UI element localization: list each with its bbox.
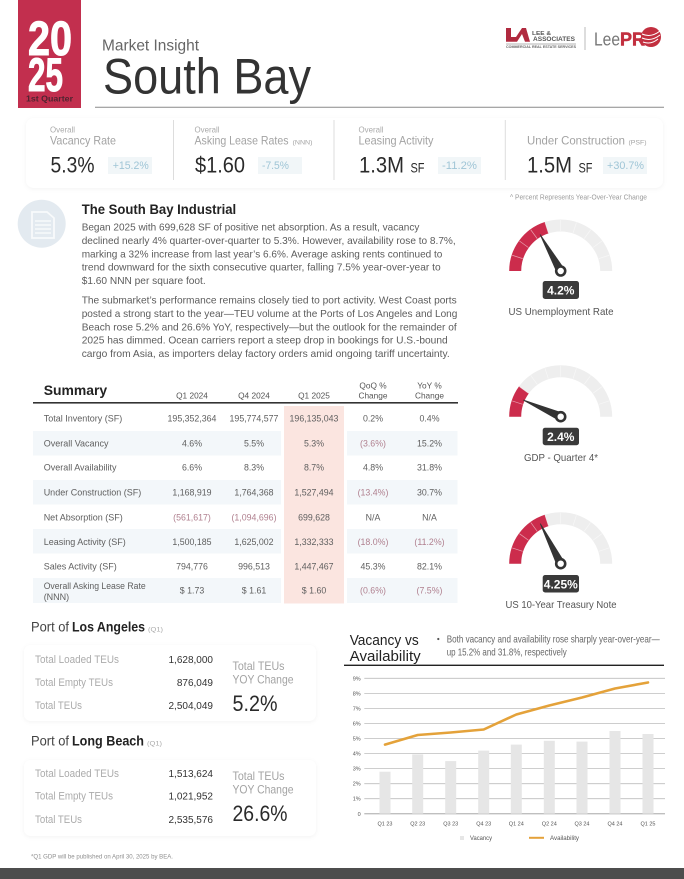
row: sales activity [44, 561, 442, 571]
row: leasing activity [44, 537, 445, 547]
gauge: GDP quarter 4 [512, 366, 609, 464]
legend: Availability [550, 836, 579, 842]
row: under construction: 30.7% [417, 488, 442, 498]
stat: leasing activity: -11.2% [442, 160, 477, 172]
highlighted column [284, 406, 344, 604]
gauge: GDP quarter 4: 2.4% [547, 430, 575, 444]
text block: market overview: trend downward for the sixth consecutive quarter, falling 7.5% year-over-year to [82, 262, 441, 274]
x axis labels: Q2 23 [410, 821, 425, 827]
logo: Lee and Associates, LeePRO: Lee [594, 29, 620, 49]
heading: port of long beach: Port of [31, 732, 69, 748]
row: net absorption [44, 512, 437, 522]
row: net absorption: 699,628 [298, 512, 330, 522]
table header: Q4 2024 [238, 390, 270, 400]
text block: market overview: Beach rose 5.2% and 26.6% YoY, respectively—but the outlook for the remainder of [82, 321, 457, 333]
footer bar [0, 868, 684, 879]
heading: vacancy vs availability [344, 632, 664, 666]
row: total inventory: 0.4% [419, 414, 440, 424]
heading: the south bay industrial: The South Bay Industrial [82, 202, 236, 217]
stat: asking lease rates: -7.5% [262, 160, 289, 172]
gauge: US unemployment rate: 4.2% [547, 284, 575, 298]
heading: port of long beach: Long Beach [72, 732, 144, 748]
heading: vacancy vs availability: Availability [350, 648, 421, 665]
table header: YoY % [417, 380, 442, 390]
panel: long beach TEUs: 2,535,576 [168, 815, 213, 826]
x axis labels: Q3 23 [443, 821, 458, 827]
table header: QoQ % [359, 380, 387, 390]
row: asking lease rate: (7.5%) [417, 586, 443, 596]
row: overall vacancy: 5.5% [244, 438, 264, 448]
heading: port of long beach [31, 732, 162, 748]
row: under construction: 1,527,494 [294, 488, 334, 498]
heading: port of long beach: (Q1) [147, 740, 162, 747]
x axis labels: Q1 23 [378, 821, 392, 827]
stat: under construction: SF [578, 159, 592, 175]
stat: vacancy rate: Vacancy Rate [50, 133, 116, 147]
panel: summary table [33, 380, 458, 604]
gauge: US 10-year treasury note [506, 513, 617, 611]
stat: leasing activity [358, 125, 481, 177]
panel: long beach TEUs: Total TEUs [35, 814, 82, 826]
table header [33, 380, 458, 404]
panel: los angeles TEUs: 5.2% [232, 691, 278, 716]
y axis labels [353, 676, 361, 818]
x axis labels: Q1 25 [641, 821, 655, 827]
row: sales activity: 1,447,467 [294, 561, 334, 571]
gauge: US unemployment rate: US Unemployment Rate [508, 306, 614, 318]
y axis labels: 1% [353, 797, 361, 803]
panel: los angeles TEUs: YOY Change [232, 672, 294, 686]
row: overall availability: Overall Availability [44, 463, 117, 473]
row: total inventory: 195,774,577 [230, 414, 279, 424]
row: total inventory: 195,352,364 [168, 414, 217, 424]
availability line [385, 682, 648, 745]
row: leasing activity: (18.0%) [358, 537, 388, 547]
panel: key stats [26, 118, 663, 188]
title block [95, 38, 664, 107]
row: under construction: 1,764,368 [234, 488, 274, 498]
row: asking lease rate: Overall Asking Lease Rate [44, 581, 146, 591]
logo: Lee and Associates, LeePRO: PR [620, 29, 645, 49]
panel: los angeles TEUs: Total Loaded TEUs [35, 654, 119, 666]
row: leasing activity: (11.2%) [414, 537, 445, 547]
panel: long beach TEUs: 1,513,624 [168, 769, 213, 780]
text block: market overview: declined nearly 4% quarter-over-quarter to 5.3%. However, availability rose to 8.7%, [82, 235, 456, 247]
heading: port of los angeles: Los Angeles [72, 618, 145, 634]
stat: under construction: (PSF) [628, 139, 646, 146]
heading: port of los angeles: Port of [31, 618, 69, 634]
stat: asking lease rates [194, 125, 312, 177]
row: overall vacancy: (3.6%) [360, 438, 386, 448]
panel: long beach TEUs: YOY Change [232, 782, 294, 796]
stat: leasing activity: Leasing Activity [358, 133, 434, 147]
row: overall vacancy: 4.6% [182, 438, 202, 448]
stat: leasing activity: SF [410, 159, 424, 175]
row: asking lease rate: (0.6%) [360, 586, 386, 596]
y axis labels: 3% [353, 767, 361, 773]
row: asking lease rate: (NNN) [44, 592, 69, 602]
row: total inventory [44, 414, 440, 424]
stat: under construction: +30.7% [607, 160, 644, 172]
y axis labels: 4% [353, 752, 361, 758]
stat: vacancy rate [50, 125, 152, 177]
text block: market overview: The submarket’s performance remains closely tied to port activity. West Coast ports [82, 295, 457, 307]
panel: los angeles TEUs: Total Empty TEUs [35, 677, 113, 689]
stat: asking lease rates: Overall [194, 125, 220, 135]
text block: market overview: Began 2025 with 699,628 SF of positive net absorption. As a result, vacancy [82, 222, 420, 234]
stat: under construction [527, 133, 647, 177]
row: under construction: 1,168,919 [172, 488, 212, 498]
year banner: 20 [28, 13, 72, 66]
row: under construction: Under Construction (SF) [44, 488, 141, 498]
stat: leasing activity: 1.3M [359, 152, 404, 177]
panel: los angeles TEUs: 1,628,000 [168, 655, 213, 666]
row: overall availability: 4.8% [363, 463, 383, 473]
row: total inventory: 196,135,043 [290, 414, 339, 424]
row: sales activity: 82.1% [417, 561, 442, 571]
row: leasing activity: 1,625,002 [234, 537, 274, 547]
heading: port of los angeles [31, 618, 163, 634]
legend: Vacancy [470, 836, 492, 842]
panel: los angeles TEUs [24, 645, 316, 721]
row: overall vacancy [44, 438, 442, 448]
row: net absorption: Net Absorption (SF) [44, 512, 123, 522]
x axis labels [378, 821, 655, 827]
x axis labels: Q4 23 [476, 821, 491, 827]
text block: market overview: 2025 has dimmed. Ocean carriers report a steep drop in bookings for U.S.-bound [82, 335, 448, 347]
table header: Summary [44, 382, 107, 398]
logo: Lee and Associates, LeePRO: ASSOCIATES [533, 36, 576, 43]
row: total inventory: 0.2% [363, 414, 383, 424]
stat: asking lease rates: (NNN) [292, 139, 312, 146]
row: overall availability: 6.6% [182, 463, 202, 473]
gauge: GDP quarter 4: GDP - Quarter 4* [524, 452, 598, 464]
row: asking lease rate [44, 581, 443, 602]
row: net absorption: N/A [366, 512, 380, 522]
row: sales activity: 996,513 [238, 561, 270, 571]
panel: long beach TEUs: 26.6% [232, 801, 288, 826]
panel: long beach TEUs [24, 760, 316, 836]
row: overall availability [44, 463, 442, 473]
panel: los angeles TEUs: Total TEUs [232, 659, 284, 673]
panel: los angeles TEUs: 2,504,049 [168, 701, 213, 712]
row: overall vacancy: Overall Vacancy [44, 438, 109, 448]
row: sales activity: 794,776 [176, 561, 208, 571]
stat: vacancy rate: 5.3% [50, 152, 94, 177]
row: leasing activity: 1,332,333 [294, 537, 334, 547]
row: leasing activity: 1,500,185 [172, 537, 212, 547]
row: overall availability: 8.7% [304, 463, 324, 473]
icon: document [18, 200, 66, 248]
table header: Change [358, 390, 388, 400]
stat: asking lease rates: $1.60 [195, 152, 245, 177]
legend [460, 836, 579, 842]
title block: Market Insight [102, 38, 200, 55]
heading: vacancy vs availability: Vacancy vs [350, 632, 419, 649]
table header: Change [415, 390, 444, 400]
row: net absorption: N/A [422, 512, 437, 522]
stat: under construction: 1.5M [527, 152, 572, 177]
row: overall vacancy: 5.3% [304, 438, 324, 448]
text block: market overview: $1.60 NNN per square foot. [82, 275, 206, 287]
logo: Lee and Associates, LeePRO: COMMERCIAL REAL ESTATE SERVICES [506, 45, 577, 49]
y axis labels: 0 [358, 812, 361, 818]
row: asking lease rate: $ 1.73 [180, 586, 204, 596]
stat: vacancy rate: +15.2% [113, 160, 149, 172]
y axis labels: 8% [353, 691, 361, 697]
heading: port of los angeles: (Q1) [148, 626, 163, 633]
x axis labels: Q4 24 [608, 821, 622, 827]
y axis labels: 5% [353, 736, 361, 742]
table header: Q1 2025 [298, 390, 330, 400]
panel: long beach TEUs: Total Empty TEUs [35, 791, 113, 803]
row: overall availability: 31.8% [417, 463, 442, 473]
stat: under construction: Under Construction [527, 133, 625, 147]
year banner: 25 [28, 48, 63, 101]
panel: long beach TEUs: Total Loaded TEUs [35, 768, 119, 780]
text block: market overview: marking a 32% increase from last year’s 6.6%. Average asking rents continued to [82, 248, 443, 260]
row: overall availability: 8.3% [244, 463, 264, 473]
row: overall vacancy: 15.2% [417, 438, 442, 448]
y axis labels: 6% [353, 722, 361, 728]
y axis labels: 2% [353, 782, 361, 788]
text block: market overview: cargo from Asia, as importers delay factory orders amid ongoing tariff uncertainty. [82, 348, 450, 360]
chart: vacancy vs availability [353, 676, 665, 842]
stat: vacancy rate: Overall [50, 125, 75, 135]
text block: market overview [82, 202, 458, 360]
row: net absorption: (561,617) [173, 512, 211, 522]
logo: Lee and Associates, LeePRO [506, 27, 661, 50]
row: under construction: (13.4%) [358, 488, 388, 498]
x axis labels: Q3 24 [575, 821, 589, 827]
row stripes [33, 431, 458, 603]
row: sales activity: 45.3% [361, 561, 386, 571]
gauge: US 10-year treasury note: US 10-Year Treasury Note [506, 599, 617, 611]
panel: los angeles TEUs: Total TEUs [35, 700, 82, 712]
title block: South Bay [103, 49, 311, 105]
row: asking lease rate: $ 1.60 [302, 586, 326, 596]
row: net absorption: (1,094,696) [232, 512, 277, 522]
year banner [18, 0, 81, 108]
panel: long beach TEUs: 1,021,952 [168, 792, 213, 803]
x axis labels: Q2 24 [542, 821, 557, 827]
table header: Q1 2024 [176, 390, 208, 400]
stat: leasing activity: Overall [358, 125, 384, 135]
row: sales activity: Sales Activity (SF) [44, 561, 117, 571]
row: under construction [44, 488, 442, 498]
note: percent basis: ^ Percent Represents Year-Over-Year Change [510, 195, 647, 202]
text block: market overview: posted a strong start to the year—TEU volume at the Ports of Los Angeles and Long [82, 308, 458, 320]
y axis labels: 7% [353, 706, 361, 712]
gauge: US unemployment rate [508, 220, 614, 318]
year banner: 1st Quarter [26, 94, 74, 104]
callout: chart takeaway: up 15.2% and 31.8%, respectively [447, 647, 567, 659]
stat: asking lease rates: Asking Lease Rates [194, 133, 288, 147]
y axis labels: 9% [353, 676, 361, 682]
row: asking lease rate: $ 1.61 [242, 586, 266, 596]
row: total inventory: Total Inventory (SF) [44, 414, 122, 424]
logo: Lee and Associates, LeePRO: LEE & [532, 31, 551, 37]
x axis labels: Q1 24 [509, 821, 524, 827]
panel: long beach TEUs: Total TEUs [232, 769, 284, 783]
vacancy bars [380, 731, 654, 814]
row: leasing activity: Leasing Activity (SF) [44, 537, 126, 547]
panel: los angeles TEUs: 876,049 [177, 678, 213, 689]
footnote: *Q1 GDP will be published on April 30, 2025 by BEA. [31, 854, 173, 861]
callout: chart takeaway [437, 633, 660, 659]
gauge: US 10-year treasury note: 4.25% [544, 577, 578, 591]
